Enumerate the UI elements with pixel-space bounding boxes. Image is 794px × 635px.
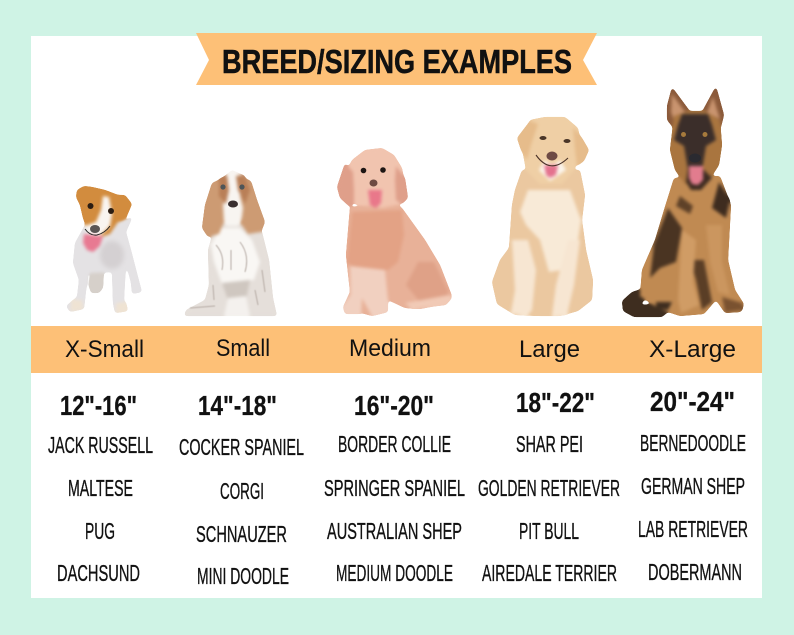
measurement: 14"-18" bbox=[198, 390, 277, 421]
breed list: SCHNAUZER bbox=[196, 521, 287, 547]
breed list: DOBERMANN bbox=[648, 559, 742, 585]
size label band bbox=[31, 326, 762, 373]
breed list: GOLDEN RETRIEVER bbox=[478, 475, 620, 501]
breed list: AUSTRALIAN SHEP bbox=[327, 518, 462, 544]
icon: small dog, cocker spaniel bbox=[184, 170, 277, 316]
breed list: MALTESE bbox=[68, 475, 133, 501]
breed list: MINI DOODLE bbox=[197, 563, 289, 589]
column: x-large sizes and breeds bbox=[638, 386, 748, 585]
measurement: 18"-22" bbox=[516, 387, 595, 418]
breed list: MEDIUM DOODLE bbox=[336, 560, 453, 586]
column: large sizes and breeds bbox=[478, 387, 620, 586]
size label: X-Small: X-Small bbox=[65, 336, 144, 363]
breed list bbox=[324, 431, 465, 586]
measurement: 20"-24" bbox=[650, 386, 735, 417]
breed list bbox=[478, 431, 620, 586]
breed list bbox=[48, 432, 153, 586]
column: x-small sizes and breeds bbox=[48, 390, 153, 586]
breed list: BORDER COLLIE bbox=[338, 431, 451, 457]
title banner bbox=[196, 33, 597, 85]
breed list: SPRINGER SPANIEL bbox=[324, 475, 465, 501]
breed list: SHAR PEI bbox=[516, 431, 583, 457]
fur streaks bbox=[190, 242, 265, 308]
size label: Large: Large bbox=[519, 336, 580, 363]
title banner: BREED/SIZING EXAMPLES bbox=[222, 43, 572, 80]
icon: large dog, golden retriever bbox=[492, 117, 593, 316]
breed list: PIT BULL bbox=[519, 518, 579, 544]
breed list: JACK RUSSELL bbox=[48, 432, 153, 458]
breed list: PUG bbox=[85, 518, 115, 544]
size label: X-Large: X-Large bbox=[649, 336, 736, 363]
breed list bbox=[638, 430, 748, 585]
breed list: COCKER SPANIEL bbox=[179, 434, 304, 460]
breed list bbox=[179, 434, 304, 589]
tail-to-chest shading bbox=[100, 241, 124, 269]
icon: medium dog, doodle bbox=[337, 148, 452, 316]
breed list: DACHSUND bbox=[57, 560, 140, 586]
breed list: AIREDALE TERRIER bbox=[482, 560, 617, 586]
icon: x-small dog, jack russell bbox=[66, 186, 142, 313]
measurement: 16"-20" bbox=[354, 390, 434, 421]
column: small sizes and breeds bbox=[179, 390, 304, 589]
breed list: CORGI bbox=[220, 478, 264, 504]
icon: x-large dog, german shepherd bbox=[622, 86, 744, 317]
column: medium sizes and breeds bbox=[324, 390, 465, 586]
measurement: 12"-16" bbox=[60, 390, 137, 421]
size label: Medium: Medium bbox=[349, 335, 431, 362]
size label: Small: Small bbox=[216, 335, 270, 362]
